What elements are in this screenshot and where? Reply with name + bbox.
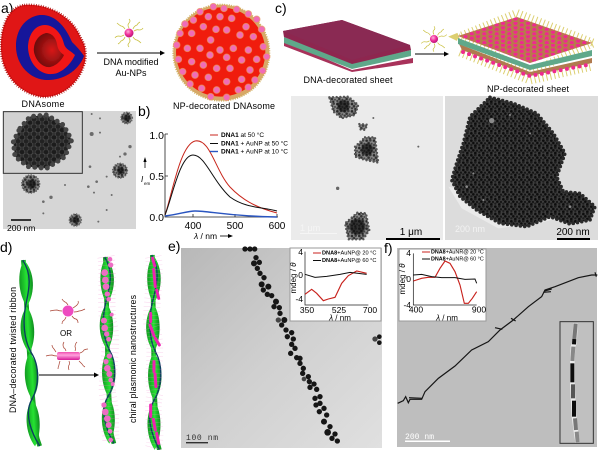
caption: NP-decorated DNAsome: NP-decorated DNAsome bbox=[173, 101, 275, 111]
nanoparticle chain e bbox=[242, 246, 382, 444]
inset chart e: DNA8+AuNP@ 60 °C bbox=[322, 258, 376, 264]
arrow d bbox=[39, 372, 99, 378]
inset chart e: 4 bbox=[298, 247, 303, 257]
label d: d) bbox=[0, 239, 12, 255]
inset micrograph a bbox=[3, 112, 82, 173]
TEM image c right bbox=[445, 96, 598, 240]
caption: DNA-decorated sheet: DNA-decorated sheet bbox=[304, 75, 393, 85]
inset chart e: 700 bbox=[363, 305, 377, 315]
scale bar c left bbox=[386, 227, 440, 240]
NP-decorated DNAsome sphere bbox=[173, 3, 270, 101]
caption: DNA modified Au-NPs bbox=[103, 57, 159, 78]
inset chart f: 400 bbox=[409, 304, 423, 314]
scale e: 100 nm bbox=[186, 434, 218, 443]
nanorod chain f bbox=[398, 272, 597, 403]
TEM image e bbox=[181, 246, 382, 448]
inset chart f: DNA8+AuNR@ 60 °C bbox=[431, 256, 484, 262]
DNAsome illustration bbox=[1, 5, 86, 97]
caption: chiral plasmonic nanostructures: chiral plasmonic nanostructures bbox=[128, 294, 138, 423]
legend b: DNA1 + AuNP at 50 °C bbox=[221, 140, 288, 148]
icon: nanoparticle c bbox=[421, 26, 447, 52]
icon: nanorod d bbox=[46, 342, 88, 370]
icon: spherical nanoparticle d bbox=[50, 299, 85, 324]
inset chart f: 900 bbox=[472, 304, 486, 314]
scale bar c left: 1 μm bbox=[400, 227, 422, 238]
scale label a: 200 nm bbox=[7, 223, 35, 233]
inset chart f: 0 bbox=[406, 274, 411, 284]
TEM image c left bbox=[291, 96, 443, 240]
legend b bbox=[210, 131, 288, 156]
text: OR: OR bbox=[60, 329, 72, 338]
TEM image f bbox=[397, 248, 597, 447]
arrow a bbox=[97, 50, 165, 56]
chart b: emission spectra: em bbox=[144, 181, 151, 186]
arrow c bbox=[415, 52, 449, 56]
chart b: emission spectra: 1.0 bbox=[149, 130, 164, 142]
chart b: emission spectra: 600 bbox=[269, 221, 286, 232]
scale c left (faint) bbox=[300, 223, 337, 234]
inset chart f: -4 bbox=[403, 300, 411, 310]
caption: DNA-decorated twisted ribbon: DNA–decorated twisted ribbon bbox=[8, 287, 18, 413]
inset chart e: DNA8+AuNP@ 20 °C bbox=[322, 250, 376, 256]
scale bar a bbox=[11, 219, 31, 221]
chart b: emission spectra: 0.0 bbox=[149, 212, 164, 224]
caption: DNA modified Au-NPs: Au-NPs bbox=[115, 68, 147, 78]
chart b: emission spectra: 0.5 bbox=[149, 171, 164, 183]
legend b: DNA1 at 50 °C bbox=[221, 131, 264, 139]
twisted ribbon bbox=[17, 260, 43, 447]
inset chart e bbox=[289, 247, 381, 322]
inset chart e: 350 bbox=[300, 305, 314, 315]
scale f: 200 nm bbox=[405, 433, 434, 442]
chart b: emission spectra bbox=[141, 130, 286, 232]
ribbon with nanorods bbox=[146, 255, 162, 450]
inset chart e: mdeg / θ bbox=[289, 262, 298, 294]
inset chart e: λ / nm bbox=[328, 314, 351, 322]
inset chart f: mdeg / θ bbox=[398, 263, 407, 295]
icon: DNA modified gold nanoparticle bbox=[115, 19, 143, 47]
TEM image a bbox=[3, 111, 136, 229]
caption: DNAsome: DNAsome bbox=[22, 99, 64, 109]
label c: c) bbox=[275, 0, 287, 16]
inset chart e: 525 bbox=[332, 305, 346, 315]
scale c left (faint): 1 μm bbox=[300, 223, 320, 233]
axis label b: λ / nm bbox=[193, 231, 217, 241]
chart b: emission spectra: 400 bbox=[185, 221, 202, 232]
inset chart f bbox=[398, 248, 486, 322]
inset chart f: DNA8+AuNR@ 20 °C bbox=[431, 250, 484, 256]
chart b: emission spectra: I bbox=[141, 175, 144, 184]
inset chart e: -4 bbox=[295, 294, 303, 304]
inset chart f: λ / nm bbox=[435, 314, 458, 322]
label a: a) bbox=[1, 0, 13, 16]
NP-decorated sheet bbox=[458, 13, 594, 80]
scale f bbox=[405, 433, 450, 442]
scale c right (faint): 200 nm bbox=[455, 224, 485, 234]
caption: DNA modified Au-NPs: DNA modified bbox=[103, 57, 159, 67]
caption: NP-decorated sheet: NP-decorated sheet bbox=[487, 84, 569, 94]
DNA-decorated sheet bbox=[283, 20, 413, 72]
inset chart f: 4 bbox=[406, 248, 411, 258]
legend b: DNA1 + AuNP at 10 °C bbox=[221, 148, 288, 156]
inset chart e: 0 bbox=[298, 270, 303, 280]
axis label b bbox=[193, 231, 233, 241]
scale bar c right: 200 nm bbox=[556, 227, 590, 238]
label f: f) bbox=[384, 240, 393, 256]
label b: b) bbox=[138, 103, 150, 119]
chart b: emission spectra: 500 bbox=[227, 221, 244, 232]
inner micrograph f bbox=[560, 322, 593, 443]
ribbon with nanoparticles bbox=[99, 257, 117, 444]
label e: e) bbox=[168, 238, 180, 254]
